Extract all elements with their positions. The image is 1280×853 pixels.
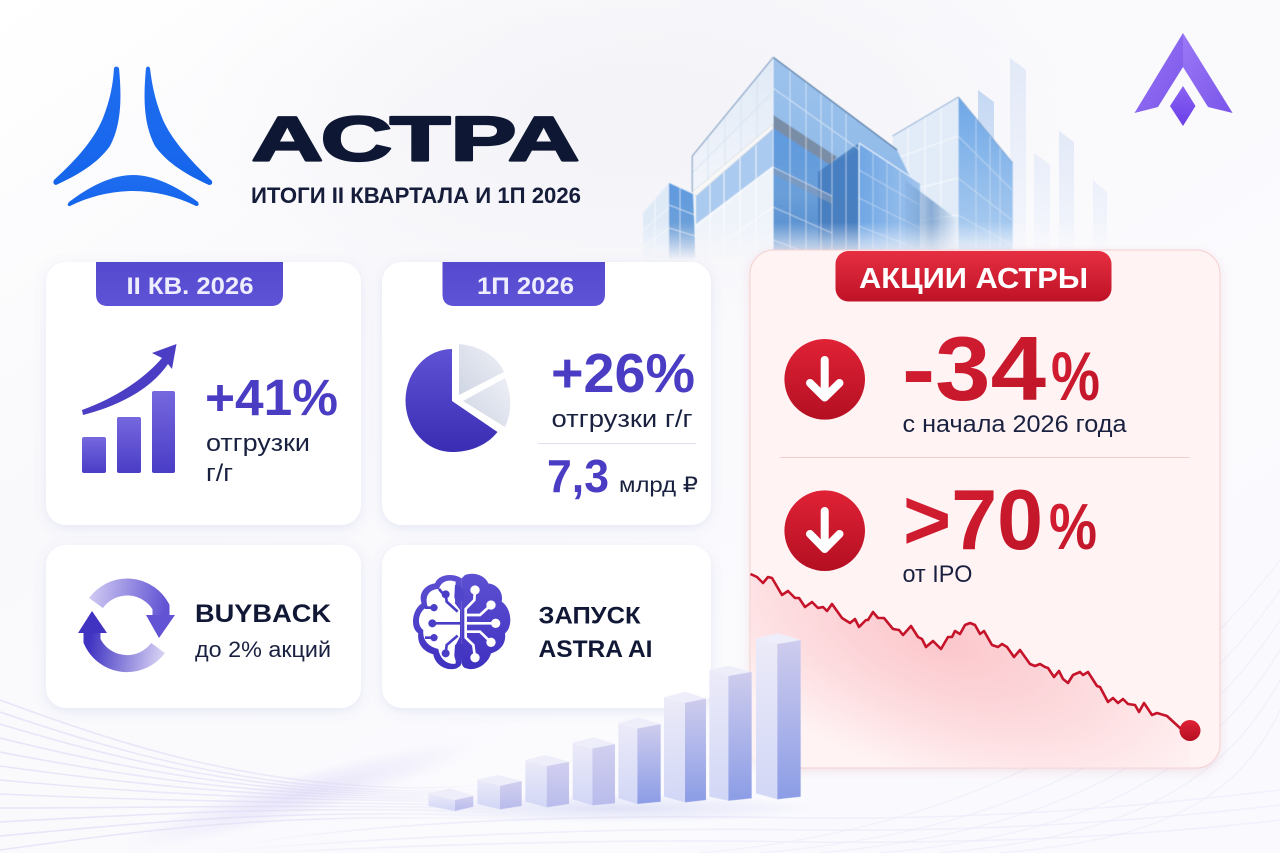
tab: 1П 2026 bbox=[442, 262, 605, 306]
tab: АКЦИИ АСТРЫ: АКЦИИ АСТРЫ bbox=[859, 263, 1088, 295]
text: до 2% акций: до 2% акций bbox=[195, 637, 331, 662]
stat: >70%: % bbox=[1049, 490, 1097, 563]
text: с начала 2026 года: с начала 2026 года bbox=[902, 411, 1127, 438]
chart: share price decline bbox=[750, 574, 1200, 767]
main tower left face bbox=[692, 57, 773, 262]
main tower right face bbox=[773, 57, 913, 262]
panel: II КВ. 2026 bbox=[46, 262, 361, 525]
stat: 7,3 млрд ₽: млрд ₽ bbox=[619, 474, 698, 497]
subtitle: ИТОГИ II КВАРТАЛА И 1П 2026 bbox=[251, 183, 581, 208]
chart: 3D rising bars bbox=[400, 633, 827, 823]
text: отгрузки г/г: отгрузки г/г bbox=[552, 406, 693, 433]
icon: down arrow 2 bbox=[784, 490, 865, 571]
stat: >70%: >70 bbox=[903, 473, 1043, 568]
panel: buyback bbox=[46, 545, 361, 708]
text: отгрузки г/г bbox=[206, 430, 310, 487]
centre wing bbox=[858, 142, 956, 250]
icon: circular arrows bbox=[78, 587, 175, 664]
stat: +26%: +26% bbox=[551, 342, 695, 404]
text: отгрузки г/г: отгрузки bbox=[206, 430, 310, 457]
text: ЗАПУСК ASTRA AI: ЗАПУСК bbox=[538, 602, 641, 630]
pie chart bbox=[406, 344, 510, 452]
logo: violet A mark bbox=[1134, 33, 1233, 126]
tab: II КВ. 2026 bbox=[96, 262, 283, 306]
small left block bbox=[643, 183, 696, 262]
text: ЗАПУСК ASTRA AI: ASTRA AI bbox=[538, 636, 652, 663]
tab: 1П 2026: 1П 2026 bbox=[477, 273, 574, 300]
text: отгрузки г/г: г/г bbox=[206, 460, 233, 487]
building illustration with glass facade bbox=[643, 57, 1107, 262]
stat: -34%: % bbox=[1051, 338, 1100, 415]
icon: down arrow 1 bbox=[784, 339, 865, 420]
panel: АКЦИИ АСТРЫ bbox=[750, 250, 1220, 768]
text: BUYBACK: BUYBACK bbox=[195, 600, 331, 628]
stat: +41%: +41% bbox=[205, 369, 338, 426]
text: ЗАПУСК ASTRA AI bbox=[538, 602, 652, 663]
icon: AI brain bbox=[413, 574, 510, 669]
panel: Astra AI bbox=[382, 545, 711, 708]
logo: Astra blue triangle mark bbox=[53, 66, 212, 206]
title: АСТРА: АСТРА bbox=[252, 104, 580, 174]
stat: -34%: -34 bbox=[902, 319, 1046, 420]
translucent background columns bbox=[978, 58, 1107, 228]
stat: -34% bbox=[902, 319, 1100, 420]
icon: growth bars with arrow bbox=[82, 344, 176, 473]
stat: 7,3 млрд ₽ bbox=[547, 450, 698, 502]
stat: 7,3 млрд ₽: 7,3 bbox=[547, 450, 609, 502]
text: от IPO: от IPO bbox=[902, 561, 972, 588]
tab: II КВ. 2026: II КВ. 2026 bbox=[126, 273, 254, 300]
right building bbox=[892, 97, 1013, 262]
panel: 1П 2026 bbox=[382, 262, 711, 525]
tab: АКЦИИ АСТРЫ bbox=[836, 251, 1112, 302]
